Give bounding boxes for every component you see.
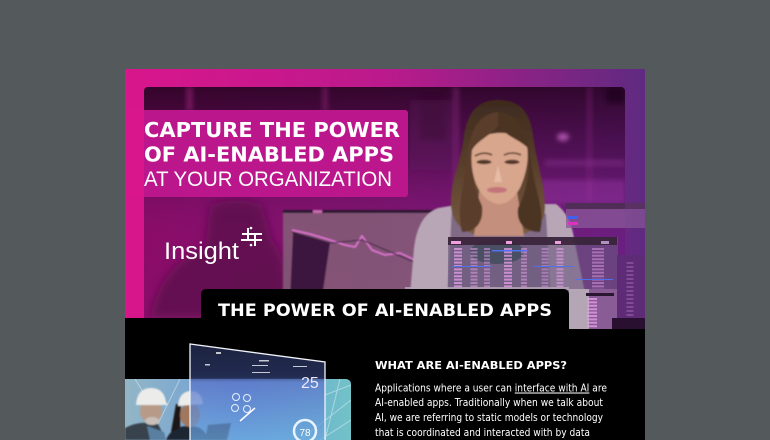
title banner: OF AI-ENABLED APPS (144, 142, 394, 166)
poster frame (125, 69, 645, 319)
laptop chart screen (282, 209, 435, 289)
engineers (125, 388, 231, 440)
blazer (410, 203, 585, 294)
lower photo: engineers with glass screen: 78 (299, 428, 311, 439)
data screens (448, 203, 625, 294)
lower photo: engineers with glass screen (125, 344, 351, 440)
section banner (201, 287, 569, 330)
title: CAPTURE THE POWER (144, 118, 400, 142)
glass screen labels: 25 (301, 375, 319, 392)
logo: Insight (164, 227, 262, 265)
title banner (125, 110, 408, 197)
face (472, 133, 528, 204)
black lower section (125, 318, 645, 440)
glass screen (190, 344, 325, 440)
subtitle: AT YOUR ORGANIZATION (144, 168, 392, 191)
right lower panel (569, 255, 645, 329)
hero photo (144, 87, 625, 318)
right overflow screen (625, 203, 645, 228)
background person silhouette (150, 200, 287, 318)
body copy (375, 382, 607, 439)
nose shading (494, 165, 502, 182)
section banner: THE POWER OF AI-ENABLED APPS (218, 301, 552, 321)
body copy: AI, we are referring to static models or technology (375, 412, 603, 424)
heading: WHAT ARE AI-ENABLED APPS? (375, 359, 567, 372)
text: what are AI-enabled apps (375, 359, 607, 439)
body copy: AI-enabled apps. Traditionally when we talk about (375, 397, 603, 409)
neck (474, 185, 524, 236)
logo: Insight: Insight (164, 238, 239, 265)
front hair (460, 112, 498, 232)
body copy: that is coordinated and interacted with by data (375, 427, 590, 439)
woman (410, 100, 585, 294)
eyes and lips (476, 160, 492, 164)
body copy: Applications where a user can interface with AI are (375, 382, 607, 394)
icon: Insight mark (241, 227, 262, 246)
hair (451, 100, 545, 236)
